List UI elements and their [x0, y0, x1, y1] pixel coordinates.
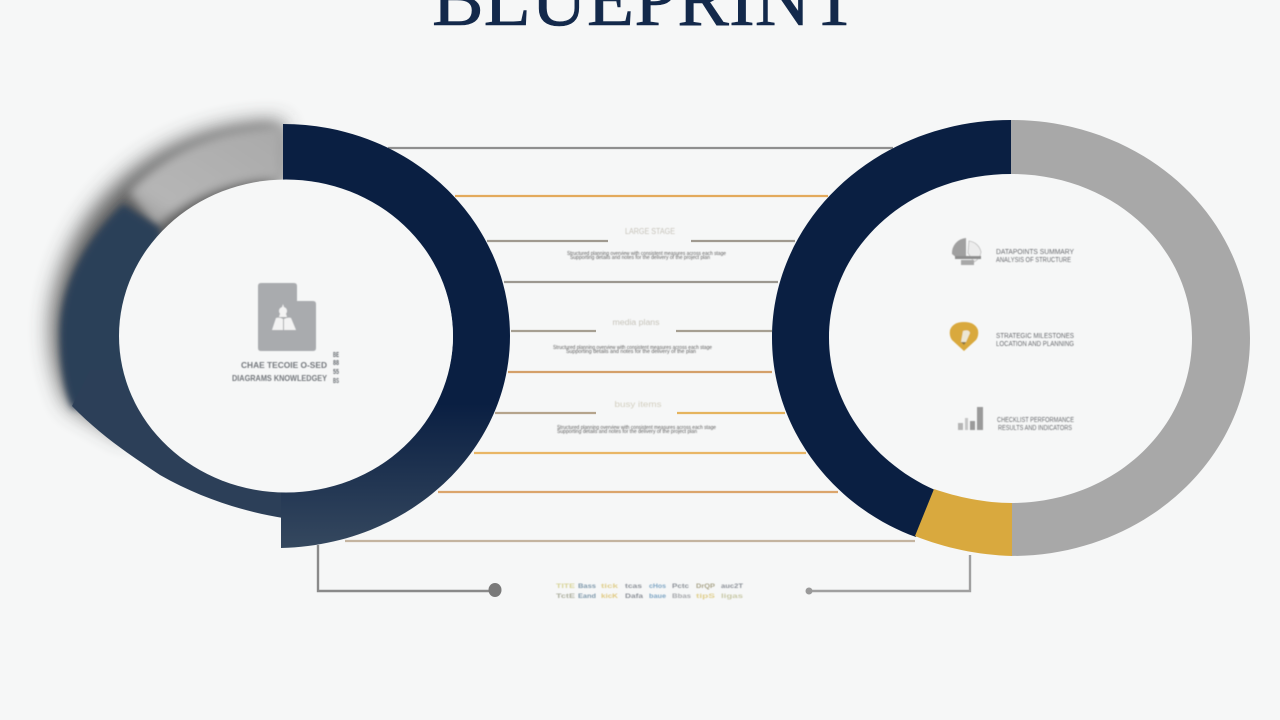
legend: TctE [556, 593, 576, 600]
text: item 1: ANALYSIS OF STRUCTURE [996, 257, 1071, 264]
left ring side mark: BS [333, 378, 339, 385]
legend [556, 583, 744, 600]
line: gray 2 [504, 281, 778, 283]
connecting lines panel [345, 148, 915, 541]
icon: bar chart [958, 407, 983, 430]
legend: Eand [578, 593, 596, 600]
bottom connector: right [806, 555, 970, 594]
segment: slate lower part [72, 370, 283, 518]
segment: slate blurred upper part [60, 204, 160, 408]
line: orange 4 [438, 491, 838, 493]
line: orange 1 [455, 195, 828, 197]
legend: kicK [601, 593, 618, 600]
label: busy items [614, 399, 662, 409]
line: section 1 left and right [487, 240, 795, 242]
line: top gray [388, 147, 893, 149]
left ring caption: DIAGRAMS KNOWLEDGEY [232, 373, 327, 383]
segment: gray [128, 126, 283, 228]
text: item 3: CHECKLIST PERFORMANCE [997, 417, 1074, 424]
text: item 2: STRATEGIC MILESTONES [996, 333, 1074, 340]
legend: cHos [649, 583, 666, 590]
text: item 3 [997, 417, 1074, 432]
icon: pie chart [952, 238, 981, 265]
line: orange 3 [474, 452, 806, 454]
body text: Supporting details and notes for the delivery of the project plan [570, 255, 710, 261]
icon: gold pin [950, 322, 978, 351]
line: bottom tan [345, 540, 915, 542]
text: item 2 [996, 333, 1074, 348]
body text [557, 425, 716, 435]
segment: gray [1011, 120, 1250, 556]
segment: navy with slate end [281, 124, 510, 548]
body text: Structured planning overview with consistent measures across each stage [567, 251, 726, 257]
ring shadow [51, 122, 283, 440]
left ring [51, 122, 510, 548]
ring centre [119, 180, 453, 492]
body text: Structured planning overview with consistent measures across each stage [557, 425, 716, 431]
label: media plans [612, 318, 660, 327]
body text [553, 345, 712, 355]
segment: gold [915, 489, 1012, 556]
legend: baue [649, 593, 666, 600]
legend: Dafa [625, 593, 643, 600]
body text: Supporting details and notes for the delivery of the project plan [557, 429, 697, 435]
body text [567, 251, 726, 261]
left ring side mark: BE [333, 352, 339, 359]
centre block 2 [553, 318, 712, 355]
centre block 1 [567, 227, 726, 261]
legend: TITE [556, 583, 576, 590]
legend: Pctc [672, 583, 689, 590]
left ring side mark [333, 352, 339, 385]
line: orange 2 [508, 371, 772, 373]
left ring caption: CHAE TECOIE O-SED [241, 360, 327, 370]
line: section 3 right [677, 412, 785, 414]
legend: auc2T [721, 583, 743, 590]
text: item 1: DATAPOINTS SUMMARY [996, 249, 1074, 256]
text: item 2: LOCATION AND PLANNING [996, 341, 1074, 348]
icon: document with book [258, 283, 316, 351]
centre block 3 [557, 399, 716, 435]
left ring caption [232, 360, 327, 383]
body text: Supporting details and notes for the delivery of the plan [566, 349, 696, 355]
legend: Bbas [672, 593, 691, 600]
label: LARGE STAGE [625, 227, 675, 236]
line: section 2 left and right [511, 330, 772, 332]
legend: tipS [696, 593, 716, 600]
legend: tick [601, 583, 619, 590]
right ring [772, 120, 1250, 556]
line: section 3 left [495, 412, 596, 414]
legend: ligas [721, 593, 744, 600]
legend: tcas [625, 583, 642, 590]
bottom connector: left [318, 545, 502, 597]
text: item 3: RESULTS AND INDICATORS [998, 425, 1072, 432]
legend: Bass [578, 583, 596, 590]
body text: Structured planning overview with consistent measures across each stage [553, 345, 712, 351]
left ring side mark: 55 [333, 369, 339, 376]
legend: DrQP [696, 583, 716, 590]
text: item 1 [996, 249, 1074, 264]
left ring side mark: 88 [333, 360, 339, 367]
segment: navy [772, 120, 1011, 537]
